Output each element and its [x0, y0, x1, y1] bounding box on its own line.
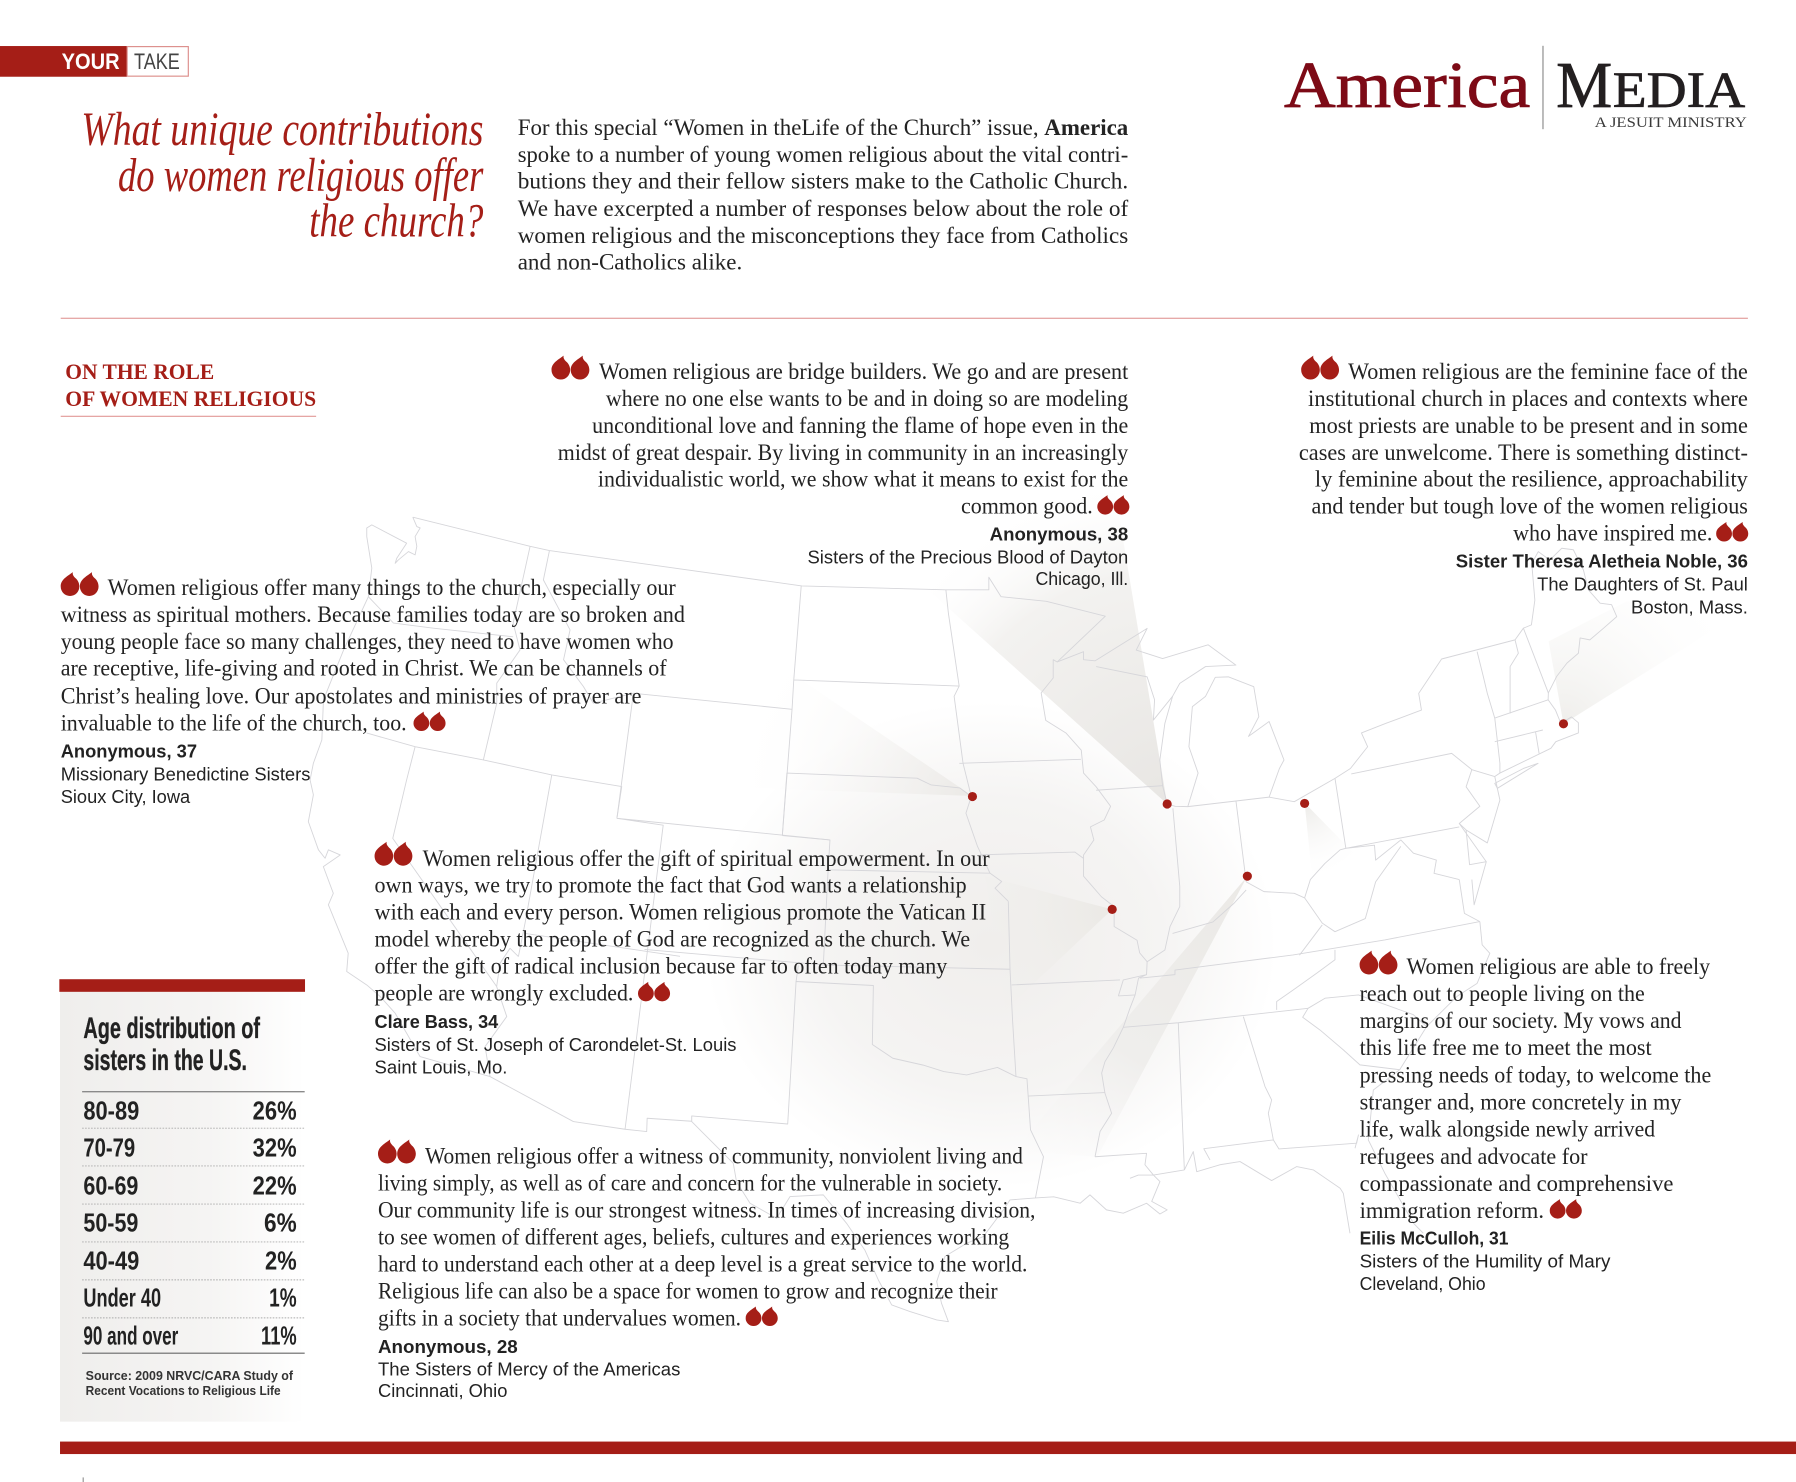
section heading: On the role of women religious	[61, 360, 316, 417]
logo: America Media: EDIA	[1613, 62, 1746, 118]
city markers	[968, 719, 1568, 914]
source note: Recent Vocations to Religious Life	[86, 1384, 281, 1398]
row: Under 40	[83, 1285, 297, 1313]
map: United States outline with light beams	[308, 481, 1732, 1322]
quote text: hard to understand each other at a deep level is a great service to the world.	[378, 1251, 1027, 1277]
icon: opening quote mark	[1360, 951, 1397, 975]
row: 90 and over	[83, 1323, 297, 1351]
intro paragraph: women religious and the misconceptions they face from Catholics	[518, 223, 1128, 249]
quote text: invaluable to the life of the church, too.	[61, 711, 407, 737]
logo: America Media	[1284, 46, 1747, 131]
row: 90 and over: 11%	[261, 1323, 297, 1351]
attribution: Sisters of the Precious Blood of Dayton	[808, 546, 1128, 567]
beam: Chicago	[871, 481, 1167, 804]
quote text: Women religious are bridge builders. We go and are present	[599, 359, 1129, 385]
icon: closing quote mark	[413, 712, 446, 731]
row: 40-49	[83, 1248, 297, 1276]
panel background	[60, 991, 305, 1422]
quote text	[1299, 359, 1748, 547]
quote text: this life free me to meet the most	[1360, 1035, 1652, 1061]
attribution: The Sisters of Mercy of the Americas	[378, 1358, 680, 1379]
intro paragraph: spoke to a number of young women religious about the vital contri-	[518, 142, 1128, 168]
attribution	[378, 1336, 680, 1401]
icon: opening quote mark	[61, 572, 99, 596]
intro paragraph: and non-Catholics alike.	[518, 250, 742, 276]
icon: opening quote mark	[378, 1140, 416, 1164]
row: 80-89: 26%	[253, 1098, 297, 1126]
row: 70-79: 32%	[253, 1134, 297, 1162]
central glow	[704, 702, 1277, 1188]
beam: Saint Louis	[985, 876, 1112, 1010]
attribution: Sister Theresa Aletheia Noble, 36	[1456, 550, 1748, 571]
section heading: On the role of women religious: ON THE ROLE	[65, 360, 214, 384]
row: 80-89: 80-89	[83, 1098, 139, 1126]
quote text: who have inspired me.	[1513, 521, 1712, 547]
row: 50-59	[83, 1210, 297, 1238]
icon: closing quote mark	[1716, 522, 1748, 541]
attribution	[1456, 550, 1748, 617]
quote text: pressing needs of today, to welcome the	[1360, 1062, 1711, 1088]
headline question: the church?	[309, 195, 483, 248]
quote text: ly feminine about the resilience, approachability	[1315, 467, 1748, 493]
quote: Sister Theresa Aletheia Noble	[1299, 356, 1748, 617]
quote text: midst of great despair. By living in community in an increasingly	[558, 440, 1129, 466]
divider rule	[61, 318, 1748, 319]
quote text: stranger and, more concretely in my	[1360, 1089, 1682, 1115]
attribution	[808, 524, 1128, 589]
intro paragraph: We have excerpted a number of responses below about the role of	[518, 196, 1128, 222]
section tag: Your Take	[0, 46, 188, 77]
panel title: sisters in the U.S.	[83, 1044, 247, 1077]
beam: Cleveland	[1305, 803, 1354, 882]
attribution: Sisters of the Humility of Mary	[1360, 1251, 1611, 1272]
logo: America Media: America	[1284, 50, 1530, 122]
quote text: cases are unwelcome. There is something distinct-	[1299, 440, 1748, 466]
icon: closing quote mark	[638, 982, 670, 1001]
source note: Source: 2009 NRVC/CARA Study of	[86, 1369, 294, 1383]
row: 40-49: 40-49	[83, 1248, 139, 1276]
headline question	[81, 103, 484, 248]
quote text: Women religious offer the gift of spiritual empowerment. In our	[423, 846, 990, 872]
row: 70-79: 70-79	[83, 1134, 135, 1162]
beam: Cincinnati	[1014, 876, 1247, 1157]
logo: America Media: M	[1556, 50, 1612, 122]
attribution: Eilis McCulloh, 31	[1360, 1228, 1509, 1249]
quote text: common good.	[961, 494, 1093, 520]
attribution	[375, 1011, 736, 1078]
panel title	[83, 1012, 260, 1077]
quote text: Religious life can also be a space for women to grow and recognize their	[378, 1278, 998, 1304]
quote text: model whereby the people of God are recognized as the church. We	[375, 927, 970, 953]
attribution: The Daughters of St. Paul	[1537, 573, 1748, 594]
quote text: Women religious are the feminine face of the	[1348, 359, 1748, 385]
quote text: young people face so many challenges, they need to have women who	[61, 629, 674, 655]
quote text: are receptive, life-giving and rooted in Christ. We can be channels of	[61, 656, 667, 682]
row: 80-89	[83, 1098, 297, 1126]
attribution: Cleveland, Ohio	[1360, 1273, 1486, 1294]
quote text: with each and every person. Women religious promote the Vatican II	[375, 900, 986, 926]
quote text	[375, 846, 990, 1006]
quote: Anonymous, 37	[61, 572, 685, 807]
quote: Eilis McCulloh	[1360, 951, 1711, 1294]
quote text: institutional church in places and contexts where	[1308, 386, 1748, 412]
bottom bar	[60, 1442, 1796, 1454]
quote text: immigration reform.	[1360, 1198, 1544, 1224]
quote text: where no one else wants to be and in doing so are modeling	[606, 386, 1129, 412]
beam: Sioux City	[719, 663, 972, 796]
attribution: Cincinnati, Ohio	[378, 1380, 507, 1401]
quote text: Our community life is our strongest witness. In times of increasing division,	[378, 1197, 1035, 1223]
quote text	[378, 1144, 1035, 1331]
quote text: witness as spiritual mothers. Because families today are so broken and	[61, 602, 685, 628]
intro paragraph: butions they and their fellow sisters make to the Catholic Church.	[518, 169, 1128, 195]
attribution: Boston, Mass.	[1631, 596, 1748, 617]
beam: Boston	[1549, 601, 1732, 724]
attribution: Anonymous, 37	[61, 741, 197, 762]
row: 70-79	[83, 1134, 297, 1162]
source note	[86, 1369, 294, 1398]
attribution: Anonymous, 38	[990, 524, 1128, 545]
attribution: Sioux City, Iowa	[61, 786, 191, 807]
quote text	[61, 575, 685, 737]
attribution: Saint Louis, Mo.	[375, 1057, 507, 1078]
icon: opening quote mark	[375, 842, 412, 866]
quote text: individualistic world, we show what it means to exist for the	[598, 467, 1128, 493]
quote text: and tender but tough love of the women religious	[1311, 494, 1748, 520]
quote text	[1360, 954, 1711, 1224]
icon: opening quote mark	[1301, 356, 1339, 380]
quote text: refugees and advocate for	[1360, 1144, 1588, 1170]
quote text: living simply, as well as of care and concern for the vulnerable in society.	[378, 1171, 1002, 1197]
row: Under 40: Under 40	[83, 1285, 161, 1313]
attribution: Clare Bass, 34	[375, 1011, 499, 1032]
quote text: Women religious are able to freely	[1407, 954, 1710, 980]
quote text: compassionate and comprehensive	[1360, 1171, 1673, 1197]
state lines	[308, 517, 1617, 1322]
attribution: Missionary Benedictine Sisters	[61, 764, 310, 785]
quote text: Women religious offer many things to the church, especially our	[108, 575, 676, 601]
quote text: gifts in a society that undervalues women.	[378, 1305, 741, 1331]
quote text: reach out to people living on the	[1360, 981, 1645, 1007]
panel title: Age distribution of	[83, 1012, 260, 1045]
quote text: unconditional love and fanning the flame of hope even in the	[592, 413, 1128, 439]
section tag: Your Take: YOUR	[62, 49, 120, 74]
attribution: Anonymous, 28	[378, 1336, 518, 1357]
headline question: do women religious offer	[118, 149, 484, 202]
quote text: most priests are unable to be present and in some	[1309, 413, 1748, 439]
row: 50-59: 50-59	[83, 1210, 138, 1238]
row: 40-49: 2%	[265, 1248, 297, 1276]
section heading: On the role of women religious: OF WOMEN RELIGIOUS	[65, 387, 316, 411]
quote text	[558, 359, 1129, 520]
quote text: offer the gift of radical inclusion because far to often today many	[375, 953, 948, 979]
attribution	[1360, 1228, 1611, 1294]
panel: age distribution table	[59, 979, 305, 1422]
row: 60-69	[83, 1172, 297, 1200]
row: 90 and over: 90 and over	[83, 1323, 178, 1351]
row: Under 40: 1%	[269, 1285, 297, 1313]
quote text: Christ’s healing love. Our apostolates and ministries of prayer are	[61, 684, 641, 710]
icon: closing quote mark	[746, 1307, 778, 1326]
icon: opening quote mark	[552, 356, 589, 380]
attribution: Chicago, Ill.	[1035, 568, 1128, 589]
intro paragraph: For this special “Women in theLife of the Church” issue, America	[518, 115, 1129, 141]
quote text: margins of our society. My vows and	[1360, 1008, 1682, 1034]
quote: Clare Bass	[375, 842, 990, 1078]
headline question: What unique contributions	[81, 103, 483, 156]
logo: America Media: A JESUIT MINISTRY	[1595, 114, 1747, 131]
icon: closing quote mark	[1550, 1199, 1582, 1219]
quote text: own ways, we try to promote the fact that God wants a relationship	[375, 873, 967, 899]
attribution	[61, 741, 310, 807]
quote text: to see women of different ages, beliefs, cultures and experiences working	[378, 1224, 1009, 1250]
quote: Anonymous, 28	[378, 1140, 1035, 1401]
quote text: Women religious offer a witness of community, nonviolent living and	[425, 1144, 1023, 1170]
panel top bar	[59, 979, 305, 992]
intro paragraph	[518, 115, 1129, 276]
quote text: people are wrongly excluded.	[375, 980, 633, 1006]
row: 60-69: 60-69	[83, 1172, 138, 1200]
attribution: Sisters of St. Joseph of Carondelet-St. Louis	[375, 1034, 736, 1055]
row: 50-59: 6%	[264, 1210, 297, 1238]
row: 60-69: 22%	[253, 1172, 297, 1200]
section tag: Your Take: TAKE	[134, 49, 180, 74]
quote text: life, walk alongside newly arrived	[1360, 1116, 1655, 1142]
quote: Anonymous, 38	[552, 356, 1129, 589]
icon: closing quote mark	[1097, 495, 1129, 515]
